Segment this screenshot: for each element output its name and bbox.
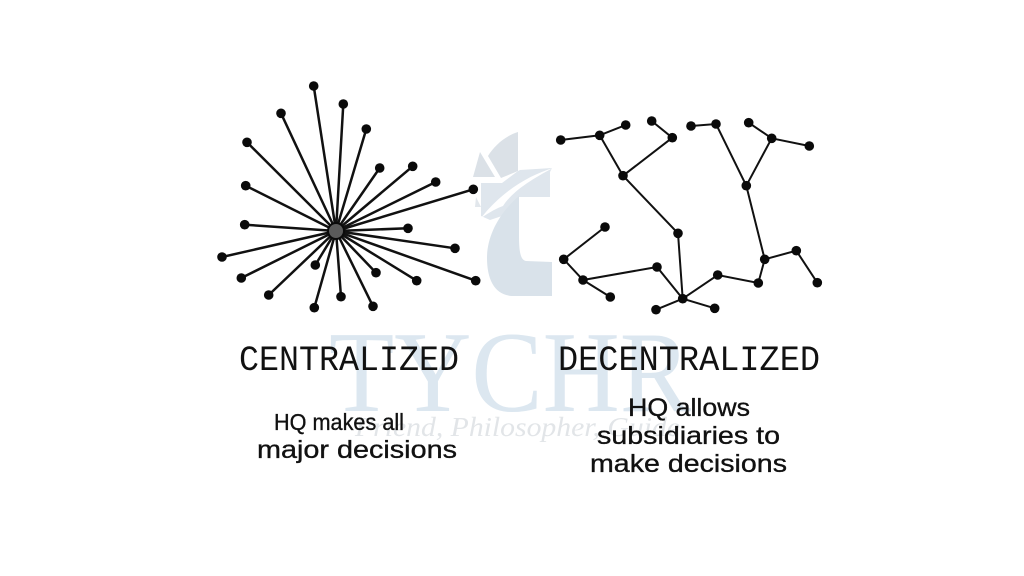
text block: centralized description: major decisions xyxy=(257,436,457,464)
star leaf nodes xyxy=(217,81,481,313)
diagram: decentralized tree network xyxy=(556,116,822,315)
text block: decentralized description: make decisions xyxy=(590,450,787,478)
watermark: TYCHR logo xyxy=(329,132,692,442)
watermark icon: letter t xyxy=(473,132,553,296)
text block: centralized description xyxy=(257,409,457,464)
central hub node xyxy=(328,223,344,239)
heading: decentralized: DECENTRALIZED xyxy=(558,341,820,381)
star spokes xyxy=(222,86,476,308)
watermark wordmark: TYCHR: TYCHR xyxy=(329,309,692,437)
tree nodes xyxy=(556,116,822,315)
text block: decentralized description xyxy=(590,394,787,478)
text block: centralized description: HQ makes all xyxy=(274,409,404,435)
heading: centralized: CENTRALIZED xyxy=(239,341,459,381)
diagram: centralized star network xyxy=(217,81,481,313)
text block: decentralized description: subsidiaries to xyxy=(597,422,780,450)
watermark tagline: Friend, Philosopher, Guide xyxy=(354,412,680,442)
text block: decentralized description: HQ allows xyxy=(628,394,750,422)
tree links xyxy=(561,121,817,310)
